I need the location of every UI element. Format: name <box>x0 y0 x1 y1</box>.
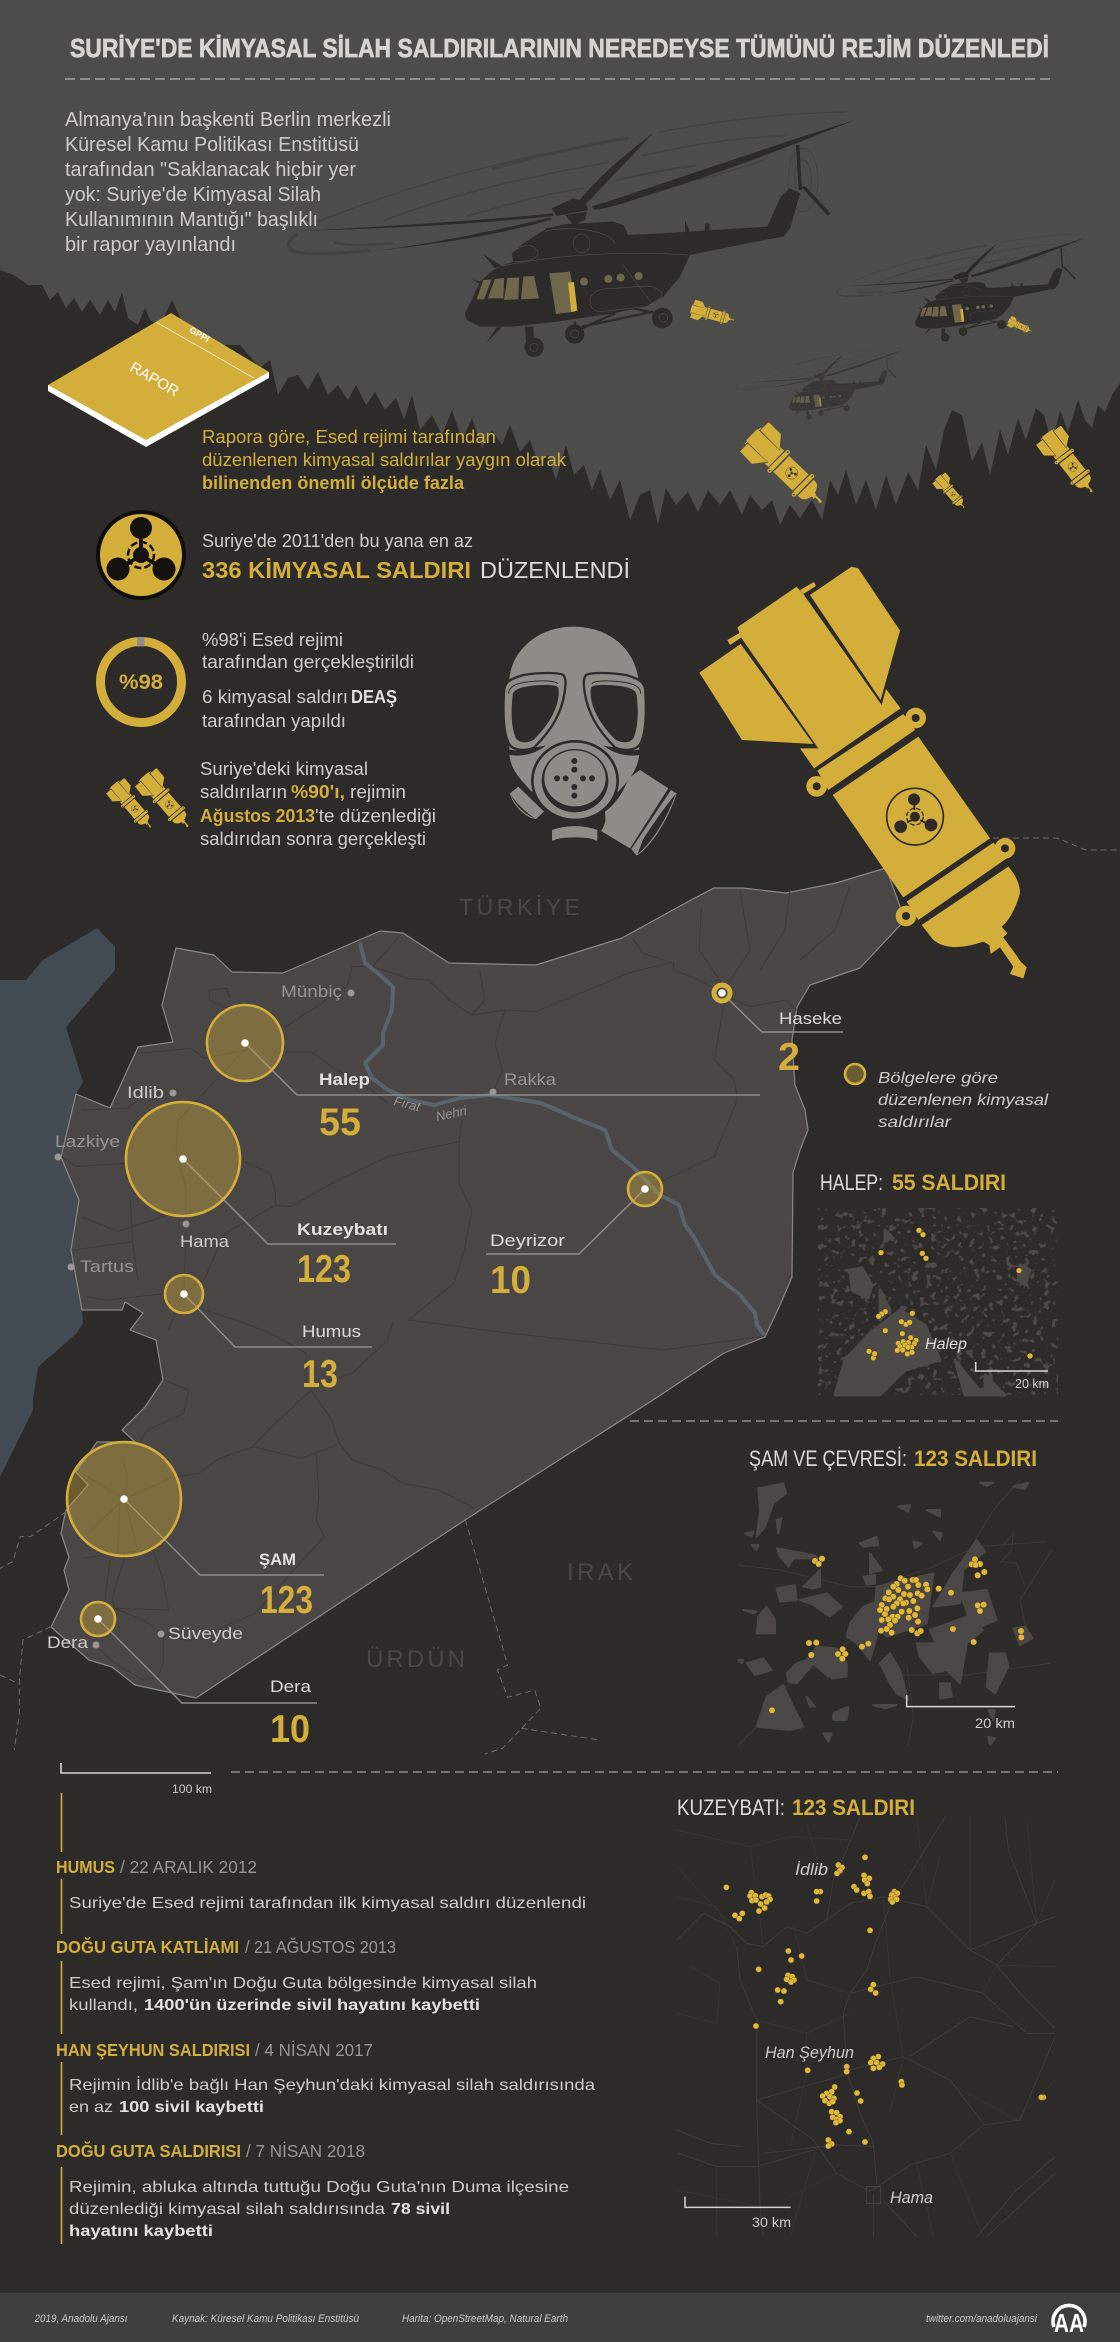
city labels: Süveyde <box>168 1624 243 1643</box>
timeline entry: Doğu Guta massacre: 1400'ün üzerinde sivil hayatını kaybetti <box>144 1997 480 2014</box>
timeline entry: Han Şeyhun: 100 sivil kaybetti <box>119 2099 264 2116</box>
city labels: Dera <box>47 1633 89 1652</box>
timeline entry: Han Şeyhun: en az <box>69 2099 113 2116</box>
panel: Halep detail map: Halep <box>925 1336 967 1353</box>
report finding text: düzenlenen kimyasal saldırılar yaygın olarak <box>202 450 567 470</box>
map: Syria <box>0 868 905 1754</box>
label: Deyrizor 10: 10 <box>490 1259 531 1302</box>
panel: Halep detail map <box>818 1170 1058 1395</box>
timeline entry: Humus: HUMUS <box>56 1857 115 1877</box>
timeline entry: Doğu Guta attack <box>56 2140 569 2240</box>
label: Dera 10: 10 <box>270 1708 310 1751</box>
city labels: Tartus <box>80 1257 134 1276</box>
country labels: ÜRDÜN <box>366 1646 465 1673</box>
timeline entry: Han Şeyhun: Rejimin İdlib'e bağlı Han Şeyhun'daki kimyasal silah saldırısında <box>69 2075 595 2094</box>
stat: 336 attacks: Suriye'de 2011'den bu yana en az <box>202 531 473 551</box>
label: Halep 55: 55 <box>319 1101 361 1144</box>
intro text: bir rapor yayınlandı <box>65 234 236 256</box>
stat text: perpetrators: 6 kimyasal saldırı <box>202 687 348 707</box>
second helicopter <box>837 234 1086 342</box>
icon: gas mask <box>503 627 677 856</box>
timeline entry: Doğu Guta attack: Rejimin, abluka altında tuttuğu Doğu Guta'nın Duma ilçesine <box>69 2179 569 2196</box>
panel: Halep detail map: 20 km <box>1015 1376 1049 1391</box>
sea <box>0 928 115 1477</box>
map legend: Bölgelere göre <box>878 1070 998 1087</box>
timeline entry: Humus: Suriye'de Esed rejimi tarafından ilk kimyasal saldırı düzenlendi <box>69 1895 586 1912</box>
timeline entry: Doğu Guta attack: düzenlediği kimyasal silah saldırısında <box>69 2201 385 2218</box>
label: Humus 13: 13 <box>302 1353 338 1396</box>
intro text: yok: Suriye'de Kimyasal Silah <box>65 184 321 206</box>
timeline entry: Han Şeyhun: / 4 NİSAN 2017 <box>255 2040 373 2060</box>
stat text: 90 percent: Suriye'deki kimyasal <box>200 759 368 779</box>
label: Kuzeybatı 123 <box>297 1220 388 1291</box>
label: Haseke 2 <box>778 1009 842 1079</box>
timeline entry: Doğu Guta attack: 78 sivil <box>391 2201 450 2218</box>
panel: Kuzeybatı detail map: 123 SALDIRI <box>792 1795 915 1820</box>
panel: Kuzeybatı detail map <box>677 1795 1055 2237</box>
label: Halep 55 <box>319 1070 370 1144</box>
country labels <box>366 894 633 1673</box>
city labels: Münbiç <box>281 982 343 1001</box>
stat: 336 attacks: 336 KİMYASAL SALDIRI <box>202 557 471 583</box>
map legend: saldırılar <box>878 1114 952 1131</box>
stat text: perpetrators: DEAŞ <box>351 687 397 707</box>
label: Dera 10: Dera <box>270 1677 312 1696</box>
timeline entry: Doğu Guta attack: / 7 NİSAN 2018 <box>246 2141 365 2161</box>
panel: Halep detail map: 55 SALDIRI <box>892 1170 1006 1195</box>
city labels <box>47 982 557 1652</box>
label: Şam 123: 123 <box>260 1579 313 1622</box>
label: Halep 55: Halep <box>319 1070 370 1089</box>
panel: Şam detail map: 20 km <box>975 1715 1015 1731</box>
leader lines <box>98 993 843 1703</box>
footer: 2019, Anadolu Ajansı <box>34 2313 128 2325</box>
falling bombs <box>683 289 1093 516</box>
city labels: Rakka <box>504 1070 557 1089</box>
intro text <box>65 109 391 256</box>
timeline entry: Doğu Guta attack: DOĞU GUTA SALDIRISI <box>56 2140 241 2161</box>
footer: Harita: OpenStreetMap, Natural Earth <box>402 2313 568 2325</box>
intro text: Küresel Kamu Politikası Enstitüsü <box>65 134 359 156</box>
panel: Kuzeybatı detail map: KUZEYBATI: <box>677 1795 785 1820</box>
label: Şam 123 <box>259 1550 313 1622</box>
icon: Anadolu Agency logo: AA <box>1054 2308 1084 2338</box>
panel: Kuzeybatı detail map: Han Şeyhun <box>765 2043 854 2062</box>
icon: two bombs <box>105 766 189 832</box>
stat text: perpetrators <box>202 630 414 731</box>
icon: report: RAPOR <box>127 359 182 400</box>
map scale: 100 km <box>61 1763 212 1796</box>
river label: Fırat <box>392 1093 423 1115</box>
report finding text: bilinenden önemli ölçüde fazla <box>202 473 465 493</box>
icon: chemical hazard <box>96 510 186 600</box>
main helicopter <box>288 112 855 357</box>
stat: 336 attacks: DÜZENLENDİ <box>480 557 630 583</box>
label: Şam 123: ŞAM <box>259 1550 296 1569</box>
timeline entry: Han Şeyhun <box>56 2040 595 2116</box>
third helicopter <box>736 348 904 420</box>
stat text: perpetrators: %98'i Esed rejimi <box>202 630 343 650</box>
label: Humus 13: Humus <box>302 1322 361 1341</box>
timeline entry: Doğu Guta attack: hayatını kaybetti <box>69 2223 213 2240</box>
intro text: Almanya'nın başkenti Berlin merkezli <box>65 109 391 131</box>
panel: Şam detail map: 123 SALDIRI <box>914 1446 1037 1471</box>
icon: report <box>48 313 269 447</box>
timeline entry: Doğu Guta massacre: kullandı, <box>69 1997 138 2014</box>
panel: Halep detail map: HALEP: <box>820 1170 883 1195</box>
country labels: TÜRKİYE <box>459 894 580 920</box>
footer: Kaynak: Küresel Kamu Politikası Enstitüsü <box>172 2313 359 2325</box>
timeline rule <box>60 1793 62 2244</box>
label: Deyrizor 10: Deyrizor <box>490 1231 565 1250</box>
stat text: 90 percent: 'te düzenlediği <box>315 806 436 826</box>
panel: Kuzeybatı detail map: Hama <box>890 2188 933 2207</box>
timeline entry: Humus <box>56 1857 586 1912</box>
label: Deyrizor 10 <box>490 1231 565 1302</box>
river: Euphrates <box>360 943 764 1335</box>
footer <box>0 2293 1120 2342</box>
stat text: 90 percent: rejimin <box>350 782 406 802</box>
stat text: 90 percent <box>200 759 436 849</box>
panel: Kuzeybatı detail map: İdlib <box>795 1860 828 1879</box>
timeline entry: Humus: / 22 ARALIK 2012 <box>120 1857 257 1877</box>
timeline entry: Doğu Guta massacre: / 21 AĞUSTOS 2013 <box>245 1936 396 1957</box>
region circles <box>67 985 730 1636</box>
map scale: 100 km: 100 km <box>172 1782 212 1796</box>
panel: Şam detail map <box>738 1446 1052 1745</box>
stat: 336 attacks <box>202 531 630 583</box>
panel: Kuzeybatı detail map: 30 km <box>752 2214 791 2230</box>
stat text: perpetrators: tarafından yapıldı <box>202 711 346 731</box>
label: Kuzeybatı 123: 123 <box>297 1248 351 1291</box>
report finding text: Rapora göre, Esed rejimi tarafından <box>202 427 496 447</box>
timeline entry: Doğu Guta massacre <box>56 1936 537 2014</box>
stat text: perpetrators: tarafından gerçekleştirildi <box>202 652 414 672</box>
chart: 98 percent ring: %98 <box>119 671 163 694</box>
intro text: tarafından "Saklanacak hiçbir yer <box>65 159 356 181</box>
border dashes east <box>993 838 1120 850</box>
river label <box>392 1093 469 1124</box>
label: Humus 13 <box>302 1322 361 1396</box>
city labels: Idlib <box>127 1083 164 1102</box>
country labels: IRAK <box>567 1559 633 1586</box>
report finding text <box>202 427 567 493</box>
stat text: 90 percent: saldırıların <box>200 782 287 802</box>
chart: 98 percent ring <box>100 637 182 722</box>
stat text: 90 percent: Ağustos 2013 <box>200 806 315 826</box>
label: Haseke 2: 2 <box>778 1036 800 1079</box>
map legend <box>845 1064 1049 1131</box>
intro text: Kullanımının Mantığı" başlıklı <box>65 209 318 231</box>
map legend: düzenlenen kimyasal <box>878 1092 1049 1109</box>
timeline entry: Han Şeyhun: HAN ŞEYHUN SALDIRISI <box>56 2040 250 2060</box>
panel: Şam detail map: ŞAM VE ÇEVRESİ: <box>749 1446 907 1471</box>
stat text: 90 percent: %90'ı, <box>291 782 345 802</box>
label: Dera 10 <box>270 1677 312 1751</box>
timeline entry: Doğu Guta massacre: Esed rejimi, Şam'ın Doğu Guta bölgesinde kimyasal silah <box>69 1975 537 1992</box>
bomb: large illustration <box>699 567 1027 978</box>
city labels: Hama <box>180 1232 230 1251</box>
footer: twitter.com/anadoluajansi <box>926 2313 1037 2325</box>
icon: report: GPPI <box>188 325 211 344</box>
label: Haseke 2: Haseke <box>779 1009 842 1028</box>
stat text: 90 percent: saldırıdan sonra gerçekleşti <box>200 829 426 849</box>
timeline entry: Doğu Guta massacre: DOĞU GUTA KATLİAMI <box>56 1936 239 1957</box>
river label: Nehri <box>435 1103 469 1124</box>
city labels: Lazkiye <box>55 1132 120 1151</box>
label: Kuzeybatı 123: Kuzeybatı <box>297 1220 388 1239</box>
